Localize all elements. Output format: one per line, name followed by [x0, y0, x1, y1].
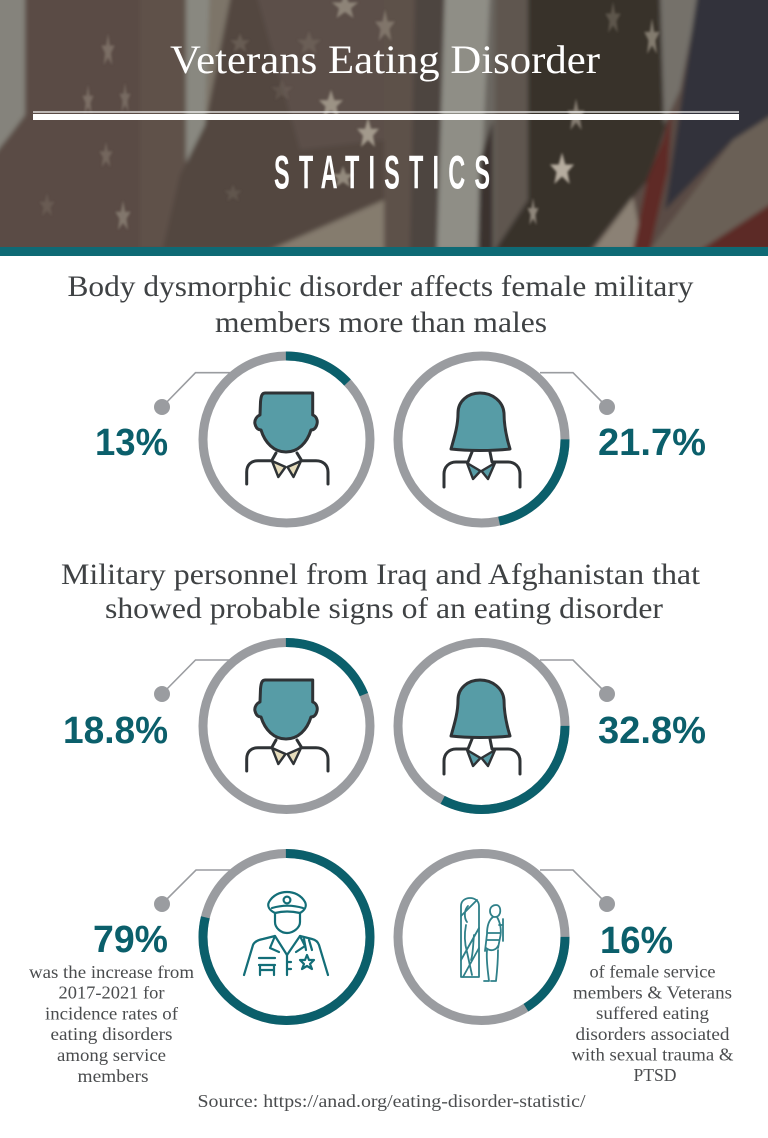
icon: figure at mirror [461, 898, 503, 981]
stat: 79% increase [29, 854, 370, 1086]
title: Veterans Eating Disorder [170, 37, 600, 82]
value 79%: 79% [93, 919, 168, 961]
callout line [540, 373, 615, 415]
header photo background: flag [0, 0, 768, 260]
icon: woman [444, 680, 520, 774]
description: members [78, 1066, 148, 1086]
callout line [540, 870, 615, 912]
source line: Source: https://anad.org/eating-disorder-statistic/ [198, 1091, 586, 1111]
value 16%: 16% [600, 920, 673, 962]
heading: body dysmorphic disorder [68, 270, 694, 339]
callout line [154, 660, 232, 702]
heading: Iraq and Afghanistan: showed probable signs of an eating disorder [105, 592, 663, 625]
callout line [540, 660, 615, 702]
icon: woman [444, 393, 520, 487]
description: with sexual trauma & [572, 1044, 734, 1064]
value 32.8%: 32.8% [598, 710, 706, 752]
description: eating disorders [50, 1024, 172, 1044]
ring gauge 13% [203, 356, 370, 523]
stat: male 13% [95, 356, 370, 523]
ring gauge 16% [398, 854, 565, 1020]
description: 2017-2021 for [58, 982, 165, 1002]
description: PTSD [634, 1065, 677, 1085]
stat: 16% trauma [398, 854, 734, 1085]
description: was the increase from [29, 962, 194, 982]
heading: Iraq and Afghanistan [61, 558, 701, 625]
icon: soldier [244, 892, 328, 975]
description: disorders associated [576, 1024, 730, 1044]
callout line [154, 870, 232, 912]
callout line [154, 373, 232, 415]
stat: female 21.7% [398, 356, 706, 523]
ring gauge 32.8% [398, 642, 565, 810]
heading: body dysmorphic disorder: members more than males [215, 306, 547, 339]
heading: Iraq and Afghanistan: Military personnel from Iraq and Afghanistan that [61, 558, 701, 591]
description: of female service [590, 962, 716, 982]
description [572, 962, 734, 1085]
subtitle: statistics: STATISTICS [274, 145, 490, 199]
description: suffered eating [596, 1003, 709, 1023]
ring gauge 18.8% [203, 642, 370, 810]
description: among service [57, 1045, 166, 1065]
description [29, 962, 194, 1086]
ring gauge 79% [203, 854, 370, 1020]
description: members & Veterans [573, 982, 732, 1002]
header teal band [0, 247, 768, 256]
value 21.7%: 21.7% [598, 422, 706, 464]
stat: male 18.8% [63, 642, 370, 810]
icon: man [247, 393, 328, 484]
heading: body dysmorphic disorder: Body dysmorphic disorder affects female military [68, 270, 694, 303]
ring gauge 21.7% [398, 356, 565, 523]
icon: man [247, 680, 328, 771]
header divider rule [33, 111, 739, 120]
value 13%: 13% [95, 422, 168, 464]
value 18.8%: 18.8% [63, 710, 168, 752]
description: incidence rates of [45, 1004, 178, 1024]
stat: female 32.8% [398, 642, 706, 810]
